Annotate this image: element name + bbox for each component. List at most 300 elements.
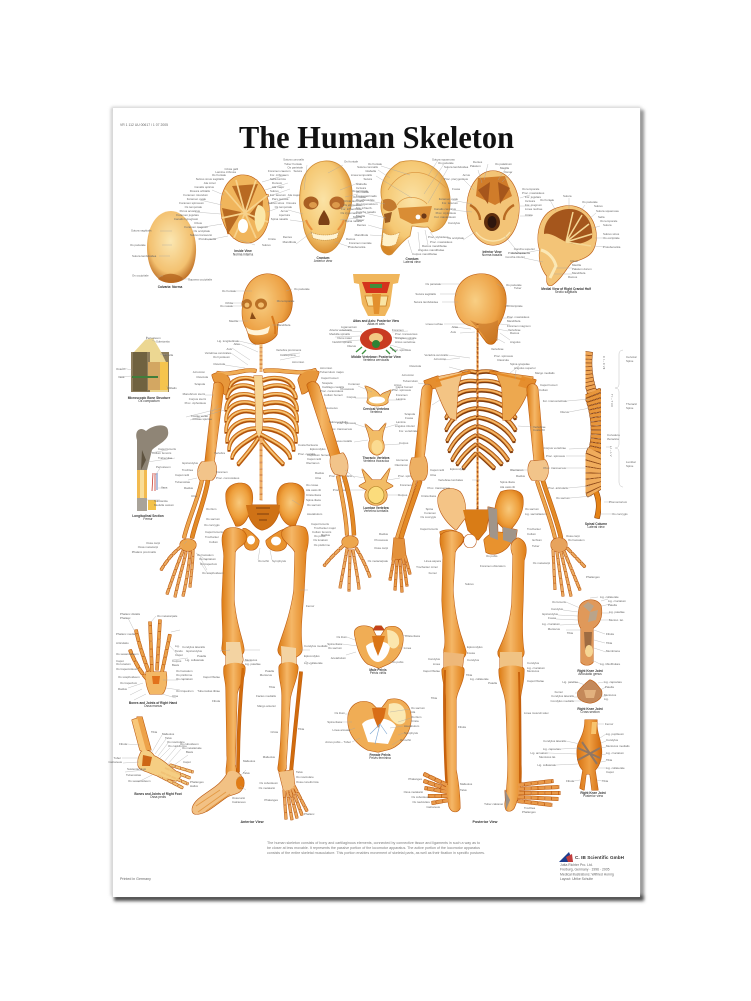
- inset: male pelvis: Os ilium: [337, 635, 348, 639]
- inset: vertebra with nerve section: Medulla spinalis: [329, 332, 351, 336]
- posterior skeleton labels: Caput humeri: [540, 383, 558, 387]
- inset: right patella: Femur: [555, 690, 563, 694]
- inset: right knee flexed: Os femoris: [552, 600, 567, 604]
- skull: anterior view: Os ethmoidale: [356, 198, 375, 202]
- anterior skeleton labels: Foramen: [216, 470, 228, 474]
- skull: anterior view: Maxilla: [356, 214, 365, 218]
- skull: anterior view: Arcus: [281, 209, 289, 213]
- publisher imprint: Medical illustrations: Wilfried Hornig: [560, 872, 614, 876]
- skull: lateral view: Sutura lambdoidea: [444, 165, 469, 169]
- inset: hand anatomy: Os trapezoideum: [116, 667, 139, 671]
- posterior left leg: [424, 531, 466, 812]
- inset: right patella: Meniscus: [604, 693, 617, 697]
- posterior skeleton labels: Angulus: [510, 340, 521, 344]
- posterior skeleton labels: Caput fibulae: [527, 679, 544, 683]
- anterior skeleton labels: Caput fibulae: [203, 675, 220, 679]
- inset: thoracic vertebra: Corpus: [399, 441, 409, 445]
- inset: right knee rear view: Condylus lateralis: [543, 739, 567, 743]
- inset: hand anatomy: Os hamatum: [176, 669, 193, 673]
- posterior skeleton labels: Epicondylus: [467, 645, 483, 649]
- posterior skeleton labels: Vertebrae: [533, 425, 546, 429]
- skull: calvaria top view: Sutura sagittalis: [131, 228, 152, 232]
- posterior skeleton labels: Lig. sacroiliacum: [525, 512, 547, 516]
- inset: bone cross-section block: Canalis: [167, 386, 177, 390]
- anterior skeleton labels: Olecranon: [306, 461, 320, 465]
- inset: bone cross-section block: [116, 336, 177, 403]
- inset: bone cross-section block: Microscopic Bone Structure: [128, 396, 170, 400]
- inset: bone cross-section block: Substantia: [156, 340, 170, 344]
- inset: vertebra with nerve section: Nervus spinalis: [332, 340, 353, 344]
- skull: base view: Proc. styloideus: [436, 211, 457, 215]
- posterior skeleton labels: Ischium: [532, 538, 543, 542]
- anterior skeleton labels: Vertebra prominens: [276, 348, 302, 352]
- inset: right knee rear view: Lig. collaterale: [606, 766, 625, 770]
- anterior skeleton labels: Facies medialis: [256, 694, 277, 698]
- inset: hand anatomy: Os sesamoideum: [116, 652, 139, 656]
- inset: female pelvis: Pelvis feminina: [369, 756, 391, 760]
- inset: right patella: Lig.: [604, 697, 609, 701]
- skull: calvaria top view: [130, 211, 213, 289]
- skull: sagittal section: Clivus: [570, 259, 578, 263]
- skull: inner base view: Clivus: [194, 221, 203, 225]
- skull: lateral view: Os frontale: [368, 162, 382, 166]
- posterior skeleton labels: Ossa carpi: [566, 534, 580, 538]
- skull: sagittal section: Sutura squamosa: [596, 209, 619, 213]
- anterior skeleton labels: Axis: [227, 347, 233, 351]
- inset: male pelvis: Acetabulum: [331, 656, 347, 660]
- skull: inner base view: Fissura orbitalis: [190, 189, 211, 193]
- skull: base view: [434, 160, 545, 257]
- skull: base view: Foramen ovale: [439, 197, 458, 201]
- anterior skeleton labels: Collum: [209, 540, 219, 544]
- inset: cervical vertebra: Arcus: [394, 383, 402, 387]
- inset: cervical vertebra: Foramen: [348, 382, 360, 386]
- posterior skeleton labels: Ossa carpi: [374, 546, 388, 550]
- posterior skeleton labels: Tibia: [431, 696, 437, 700]
- anterior skeleton labels: Condylus lateralis: [182, 645, 206, 649]
- inset: right knee rear view: Lig. cruciatum: [606, 751, 625, 755]
- anterior skeleton labels: Ossa metacarpi: [138, 545, 158, 549]
- inset: vertebra with nerve section: Vertebra cervicalis: [363, 358, 389, 362]
- inset: right knee rear view: Meniscus lat.: [539, 755, 556, 759]
- skull: inner base view: Sulcus sinus: [268, 201, 285, 205]
- skull: anterior view: [271, 158, 378, 263]
- inset: foot anatomy: Caput: [183, 760, 191, 764]
- anterior skeleton labels: Phalanx: [304, 812, 315, 816]
- anterior skeleton labels: Os sacrum: [307, 503, 322, 507]
- inset: vertebra with nerve section: Ganglion spinale: [395, 336, 417, 340]
- inset: female pelvis: Arcus pubis – Tuber: [325, 740, 351, 744]
- inset: thoracic vertebra: Fovea costalis: [334, 439, 353, 443]
- skull: sagittal section: Concha media: [511, 251, 530, 255]
- skull: base view: Inferior View: [482, 250, 502, 254]
- inset: male pelvis: Male Pelvis: [369, 668, 387, 672]
- inset: right knee rear view: Meniscus medialis: [606, 744, 630, 748]
- posterior skeleton labels: Os cuboideum: [411, 795, 431, 799]
- inset: vertebra with nerve section: Discus: [347, 344, 357, 348]
- inset: thoracic vertebra: For. vertebrale: [399, 429, 418, 433]
- inset: hand anatomy: Radius: [118, 687, 128, 691]
- anterior skeleton labels: [132, 287, 355, 824]
- inset: cervical vertebra: Lamina: [396, 397, 406, 401]
- anterior skeleton labels: Vertebra: [214, 451, 225, 455]
- anterior skeleton labels: Tibia: [269, 685, 275, 689]
- skull: anterior view: Os frontale: [344, 160, 359, 164]
- inset: lateral vertebral column: L I – L V: [609, 446, 613, 457]
- skull: inner base view: Canalis hypoglossi: [174, 217, 198, 221]
- anterior pelvis: [226, 483, 304, 551]
- publisher imprint: C. IB Scientific GmbH: [575, 855, 625, 860]
- skull: anterior view: Fissura: [287, 201, 296, 205]
- anterior skeleton labels: Os parietale: [294, 287, 310, 291]
- skull: inner base view: Norma interna: [233, 252, 253, 256]
- anterior skeleton labels: Os frontale: [222, 289, 236, 293]
- anterior skeleton labels: Meniscus: [245, 658, 258, 662]
- anterior skeleton labels: Os ischii: [258, 559, 269, 563]
- inset: lumbar vertebra: Vertebra lumbalis: [364, 509, 389, 513]
- skull: base view: For. jugulare: [525, 195, 541, 199]
- posterior skeleton labels: Os hamatum: [568, 538, 585, 542]
- posterior skeleton labels: Spina: [426, 507, 433, 511]
- anterior skeleton labels: Trochanter: [205, 535, 219, 539]
- posterior spine: [477, 325, 478, 510]
- posterior skeleton labels: Clavicula: [497, 358, 509, 362]
- inset: female pelvis: Symphysis: [404, 731, 419, 735]
- inset: femur section: [132, 425, 177, 521]
- posterior skeleton labels: Humerus: [396, 458, 409, 462]
- inset: hand anatomy: Os triquetrum: [176, 689, 194, 693]
- skull: inner base view: Ala minor: [204, 181, 216, 185]
- skull: sagittal section: Protuberantia: [603, 245, 621, 249]
- posterior skeleton labels: Acromion: [402, 373, 414, 377]
- skull: anterior view: Os zygomaticum: [356, 202, 378, 206]
- anterior skeleton labels: Anterior View: [240, 820, 264, 824]
- posterior skeleton labels: Os metacarpi: [533, 561, 550, 565]
- skull: inner base view: For. lacerum: [270, 193, 287, 197]
- anterior right leg: [278, 526, 308, 820]
- posterior right leg: [498, 538, 560, 811]
- inset: thoracic vertebra: Lamina: [396, 420, 406, 424]
- inset: right patella: Cross section: [580, 710, 600, 714]
- inset: thoracic vertebra: Thoracic Vertebra: [363, 456, 390, 460]
- inset: lateral vertebral column: thoracica: [607, 437, 619, 441]
- inset: foot anatomy: Os metatarsale: [182, 746, 202, 750]
- posterior skeleton labels: Radius: [516, 474, 526, 478]
- anterior skeleton labels: Radius: [315, 471, 325, 475]
- anterior skeleton labels: Vertebrae cervicales: [205, 351, 232, 355]
- skull: base view: Linea nuchae: [525, 207, 543, 211]
- skull: lateral view: Sutura coronalis: [357, 165, 379, 169]
- inset: right knee flexed: Epicondylus: [542, 612, 559, 616]
- anterior skeleton labels: Os capitatum: [199, 557, 217, 561]
- inset: hand anatomy: Bones and Joints of Right Hand: [129, 701, 177, 705]
- posterior skeleton labels: Caput fibulae: [423, 669, 440, 673]
- inset: lateral vertebral column: Proc. transversus: [544, 466, 567, 470]
- skull: sagittal section: Sulcus sinus: [603, 232, 620, 236]
- skull: inner base view: Sulcus transversi: [190, 233, 212, 237]
- inset: lateral vertebral column: Curvatura: [607, 433, 620, 437]
- skull: lateral view: Proc. styloideus: [428, 235, 449, 239]
- inset: femur section: Collum femoris: [152, 451, 172, 455]
- inset: lateral vertebral column: Spine: [626, 359, 634, 363]
- skull: anterior view: Anterior view: [314, 259, 333, 263]
- anterior skeleton labels: Os lunatum: [313, 538, 329, 542]
- inset: hand anatomy: Os capitatum: [176, 677, 194, 681]
- inset: femur section: Trabeculae: [158, 456, 173, 460]
- anterior skeleton labels: Os nasale: [220, 304, 233, 308]
- skull: inner base view: Foramen magnum: [184, 225, 209, 229]
- inset: bone cross-section block: Os compactum: [138, 399, 160, 403]
- posterior skeleton labels: Caput radii: [430, 468, 444, 472]
- posterior skeleton labels: Os pubis: [486, 554, 498, 558]
- anterior skeleton labels: Collum humeri: [324, 393, 343, 397]
- skull: inner base view: Porus acusticus: [180, 209, 201, 213]
- inset: lumbar vertebra: Foramen: [400, 483, 412, 487]
- posterior skeleton labels: Fossa: [405, 416, 413, 420]
- skull: inner base view: Protuberantia: [199, 237, 216, 241]
- skull: anterior view: Fossa lacrimalis: [356, 194, 377, 198]
- anterior skeleton labels: Trochanter major: [314, 526, 336, 530]
- publisher logo: [559, 852, 573, 862]
- skull: sagittal section: Ramus: [568, 275, 578, 279]
- anterior skeleton labels: Caput radii: [175, 473, 189, 477]
- posterior skeleton labels: Tibia: [466, 673, 473, 677]
- skull: sagittal section: Concha inferior: [505, 255, 525, 259]
- skull: inner base view: Os frontale: [212, 173, 226, 177]
- anterior skeleton labels: Symphysis: [272, 559, 287, 563]
- inset: foot anatomy: Os cuneiforme: [168, 744, 187, 748]
- posterior skeleton labels: Trochanter minor: [416, 565, 438, 569]
- inset: foot anatomy: Tibia: [151, 730, 158, 734]
- skull: sagittal section: Concha superior: [514, 247, 535, 251]
- skull: base view: Condylus: [448, 221, 461, 225]
- posterior scapulae and shoulders: [424, 372, 536, 420]
- anterior spine: [260, 344, 262, 500]
- posterior skeleton labels: Sutura lambdoidea: [414, 300, 438, 304]
- posterior skeleton labels: Os naviculare: [412, 800, 430, 804]
- skull: lateral view: Proc. mastoideus: [430, 240, 453, 244]
- skull: anterior view: Apertura: [279, 213, 290, 217]
- anterior skeleton labels: Calcaneus: [232, 800, 246, 804]
- anterior skeleton labels: Orbita: [225, 301, 233, 305]
- anterior skeleton labels: Spina iliaca: [306, 498, 321, 502]
- posterior skeleton labels: Olecranon: [395, 463, 408, 467]
- skull: base view: Crista: [525, 213, 533, 217]
- skull: inner base view: Sella turcica: [270, 177, 286, 181]
- inset: right knee rear view: Lig. popliteum: [606, 732, 625, 736]
- inset: foot anatomy: Os sesamoideum: [128, 779, 151, 783]
- posterior skeleton labels: Posterior View: [473, 820, 498, 824]
- anterior skeleton labels: Tuberositas: [175, 480, 191, 484]
- inset: lateral vertebral column: C I – C VII: [602, 356, 606, 370]
- inset: male pelvis: Crista iliaca: [405, 634, 420, 638]
- skull: base view: Norma basalis: [482, 253, 503, 257]
- anterior skeleton labels: Lig. longitudinale: [217, 339, 239, 343]
- skull: lateral view: Angulus mandibulae: [418, 248, 445, 252]
- skull: lateral view: Os parietale: [438, 161, 454, 165]
- inset: female pelvis: Linea arcuata: [332, 728, 350, 732]
- skull: base view: Proc. mastoideus: [522, 191, 545, 195]
- posterior skeleton labels: Radius: [379, 532, 389, 536]
- skull: sagittal section: Sulcus: [594, 204, 603, 208]
- posterior ribcage: [446, 371, 516, 469]
- inset: foot anatomy: Sustentaculum: [127, 767, 147, 771]
- inset: right knee flexed: Patella: [608, 603, 617, 607]
- inset: hand anatomy: Articulatio: [116, 641, 129, 645]
- inset: right patella: [551, 680, 622, 714]
- skull: sagittal section: Os frontale: [540, 198, 555, 202]
- skull: inner base view: Inside View: [234, 249, 252, 253]
- skull: anterior view: Foramen mentale: [349, 241, 372, 245]
- anterior skeleton labels: Humerus: [326, 406, 338, 410]
- skull: inner base view: Foramen rotundum: [183, 193, 209, 197]
- anterior skeleton labels: Epicondylus: [186, 649, 203, 653]
- anterior skeleton labels: Costae verae: [191, 414, 208, 418]
- posterior skeleton labels: Trochlea: [524, 806, 536, 810]
- skull: inner base view: [174, 167, 291, 256]
- anterior skeleton labels: Lig. patellae: [245, 662, 261, 666]
- skull: base view: For. magnum: [525, 203, 543, 207]
- inset: lateral vertebral column: Os coccygis: [612, 512, 628, 516]
- anterior skeleton labels: Radius: [184, 486, 194, 490]
- posterior skeleton labels: Condylus: [428, 657, 441, 661]
- anterior skeleton labels: Os coxae: [306, 483, 319, 487]
- skull: anterior view: Incisura: [356, 186, 367, 190]
- inset: femur section: Substantia: [154, 499, 168, 503]
- anterior skeleton labels: Talus: [243, 771, 250, 775]
- posterior skeleton labels: Linea nuchae: [426, 322, 443, 326]
- posterior skeleton labels: Talus: [460, 788, 467, 792]
- inset: hand anatomy: Corpus: [172, 659, 182, 663]
- posterior skeleton labels: Meniscus: [527, 669, 540, 673]
- skull: inner base view: Crista: [268, 237, 276, 241]
- inset: cervical vertebra: Foramen: [396, 393, 408, 397]
- anterior skeleton labels: Acromion: [193, 370, 205, 374]
- skull: base view: Canalis caroticus: [434, 207, 457, 211]
- skull: base view: Vomer: [504, 170, 512, 174]
- inset: right knee rear view: Lig. capsulare: [543, 747, 561, 751]
- posterior skeleton labels: Lig. collaterale: [470, 677, 489, 681]
- inset: right knee flexed: Condylus: [551, 607, 564, 611]
- inset: bone cross-section block: Osteon: [116, 367, 126, 371]
- skull: sagittal section: [505, 194, 621, 294]
- skull: sagittal section: Sutura: [603, 223, 612, 227]
- anterior skeleton labels: Ala ossis ilii: [306, 488, 321, 492]
- inset: female pelvis: Acetabulum: [404, 724, 420, 728]
- inset: lumbar vertebra: Corpus: [398, 493, 408, 497]
- inset: lateral vertebral column: T I – T XII: [610, 394, 614, 407]
- anterior skeleton: [132, 274, 370, 824]
- inset: femur section: Caput femoris: [158, 447, 177, 451]
- inset: right patella: Lig. capsulare: [604, 680, 622, 684]
- anterior skeleton labels: Phalanx proximalis: [132, 550, 157, 554]
- posterior skeleton labels: Epicondylus: [450, 467, 466, 471]
- inset: right knee rear view: Fibula: [566, 779, 574, 783]
- anterior skeleton labels: Tuberositas tibiae: [197, 689, 220, 693]
- inset: right knee flexed: [542, 595, 627, 676]
- inset: hand anatomy: Ossa manus: [144, 704, 162, 708]
- anterior skeleton labels: Phalanges: [264, 798, 279, 802]
- posterior skeleton labels: Spina iliaca: [500, 480, 515, 484]
- posterior skeleton labels: Vertebrae: [508, 328, 521, 332]
- catalogue code: VR 1 112 UU 00617 / 1 07 2005: [120, 123, 168, 127]
- posterior skeleton labels: Scapula: [405, 412, 415, 416]
- inset: female pelvis: Os ilium: [411, 715, 422, 719]
- inset: vertebra with nerve section: [329, 325, 418, 362]
- anterior skeleton labels: Capitulum humeri: [307, 453, 330, 457]
- skull: anterior view: Sutura: [293, 169, 302, 173]
- inset: right knee rear view: Femur: [605, 722, 613, 726]
- skull: anterior view: Spina nasalis: [271, 217, 289, 221]
- skull: lateral view: Cranium: [406, 257, 419, 261]
- skull: calvaria top view: Calvaria: Norma: [158, 285, 182, 289]
- skull: anterior view: For. infraorb.: [356, 206, 373, 210]
- posterior skeleton labels: Angulus superior: [514, 366, 536, 370]
- skull: anterior view: Ala major: [288, 193, 300, 197]
- inset: thoracic vertebra: Proc. transversus: [330, 427, 353, 431]
- inset: lateral vertebral column: Thoracic: [626, 402, 638, 406]
- posterior skeleton labels: Caput femoris: [420, 527, 439, 531]
- inset: vertebra with nerve section: Middle Vertebrae: Posterior View: [351, 355, 401, 359]
- skull: sagittal section: Os temporale: [600, 219, 618, 223]
- posterior skeleton labels: Crista iliaca: [421, 494, 436, 498]
- inset: lateral vertebral column: Os sacrum: [556, 496, 571, 500]
- skull: inner base view: Sulcus: [270, 189, 279, 193]
- inset: male pelvis: Os sacrum: [328, 646, 343, 650]
- inset: right knee rear view: Posterior view: [583, 794, 604, 798]
- inset: right knee flexed: Menisc. lat.: [609, 618, 624, 622]
- anterior skeleton labels: Acromion: [320, 366, 333, 370]
- anterior skeleton labels: Crista: [270, 730, 278, 734]
- posterior skeleton labels: Condylus: [467, 658, 480, 662]
- anterior left leg: [192, 528, 246, 814]
- inset: right knee rear view: Condylus: [606, 738, 619, 742]
- inset: cervical vertebra: Cervical Vertebra: [363, 407, 389, 411]
- anterior skeleton labels: Scapula: [195, 382, 205, 386]
- anterior skeleton labels: Tuberculum majus: [320, 370, 344, 374]
- skull: lateral view: For. infraorbitale: [341, 207, 362, 211]
- posterior skeleton labels: Tuber: [532, 544, 539, 548]
- inset: right patella: Right Knee Joint: [577, 707, 604, 711]
- skull: base view: Arcus: [463, 173, 471, 177]
- posterior skeleton labels: Phalanges: [522, 810, 536, 814]
- anterior skeleton labels: Clavicula: [213, 362, 225, 366]
- skull: inner base view: Canalis opticus: [194, 185, 215, 189]
- anterior skeleton labels: Acetabulum: [307, 512, 323, 516]
- anterior skeleton labels: Caput radii: [307, 457, 321, 461]
- posterior skeleton labels: Os metacarpale: [368, 559, 388, 563]
- posterior skeleton labels: Sutura sagittalis: [415, 292, 437, 296]
- inset: femur section: Periosteum: [156, 465, 171, 469]
- anterior left arm: [161, 382, 223, 597]
- posterior skeleton labels: Fibula: [458, 725, 466, 729]
- posterior skeleton labels: Caput humeri: [396, 385, 413, 389]
- inset: lateral vertebral column: Cervical: [626, 355, 637, 359]
- anterior skeleton labels: Collum femoris: [312, 530, 332, 534]
- skull: anterior view: Mandibula: [283, 240, 296, 244]
- inset: lateral vertebral column: Corpus vertebrae: [544, 446, 566, 450]
- inset: hand anatomy: Os trapezium: [120, 681, 138, 685]
- inset: right knee flexed: Lig. patellae: [609, 610, 625, 614]
- anterior skeleton labels: Os naviculare: [296, 775, 314, 779]
- skull: lateral view: Os nasale: [353, 195, 366, 199]
- skull: lateral view: Glabella: [365, 169, 376, 173]
- skull: inner base view: Sulcus sinus sagittalis: [196, 177, 225, 181]
- inset: lateral vertebral column: Spinal Column: [585, 522, 607, 526]
- posterior skeleton labels: Trochanter: [527, 527, 541, 531]
- publisher imprint: Layout: Ulrike Schulte: [560, 877, 593, 881]
- skull: anterior view: Protuberantia: [348, 245, 366, 249]
